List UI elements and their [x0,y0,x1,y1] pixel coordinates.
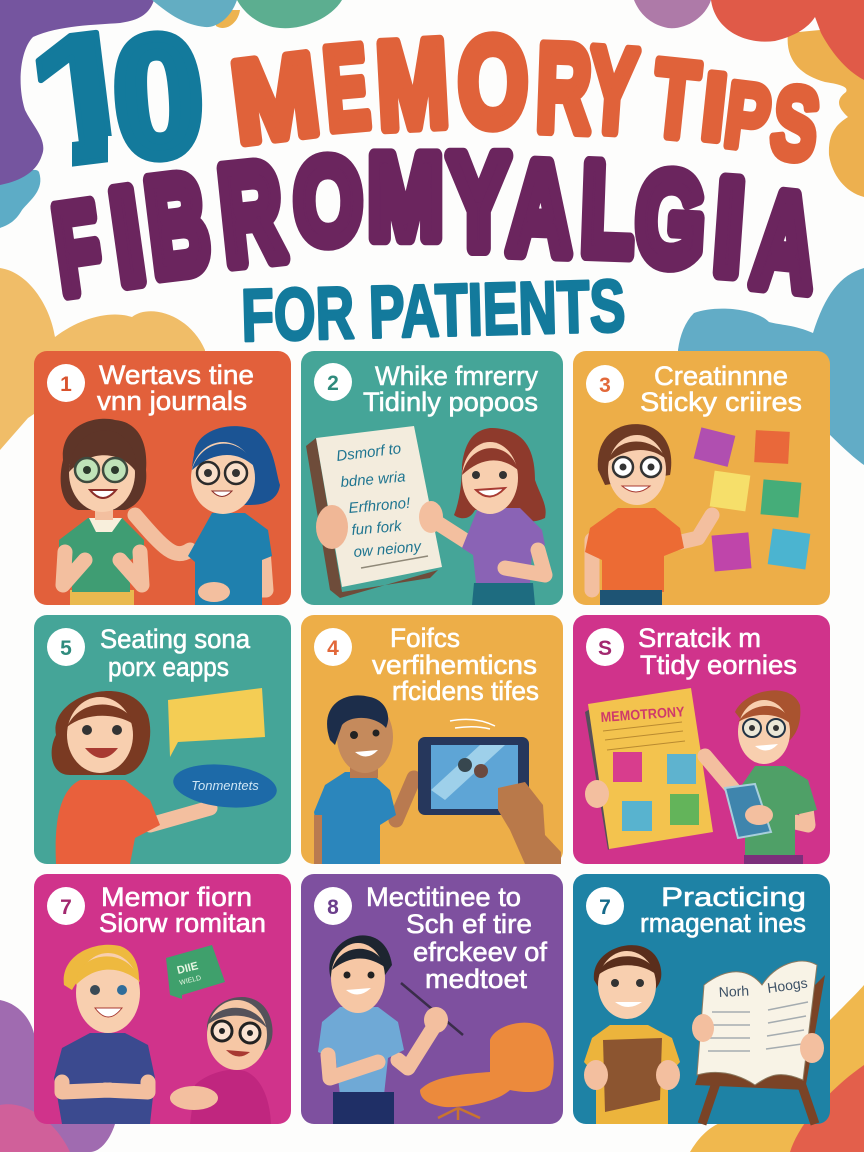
notebook with handwriting [306,426,443,598]
number badge [47,364,85,402]
title [18,0,826,357]
orange chair [420,1023,554,1120]
title line: fibromyalgia: A [506,135,575,282]
heading: Foifcs [390,623,460,653]
green sign: DIIE [176,960,199,977]
figure: blond boy [54,945,155,1124]
heading: Mectitinee to [366,882,521,912]
notebook with handwriting: bdne wria [340,468,406,491]
title line: memory tips: I [697,53,731,161]
number badge [586,887,624,925]
heading [366,882,548,994]
heading [372,623,539,706]
motion lines [450,719,495,729]
panel 4: speech bubble [34,615,291,864]
heading [363,361,538,417]
heading: Memor fiorn [101,882,252,912]
notebook with handwriting: Dsmorf to [335,440,402,465]
number badge [314,887,352,925]
title line: memory tips [225,12,826,183]
number badge: 3 [599,374,611,397]
number badge: 7 [599,896,611,919]
figure: boy in green with tablet [705,690,817,864]
heading: porx eapps [108,652,229,682]
panel 7: memory story [34,874,291,1124]
title line: memory tips: M [373,13,452,156]
title line: fibromyalgia: O [293,134,363,269]
title line: memory tips: Y [584,21,642,159]
title line: fibromyalgia: A [747,164,823,319]
heading: Whike fmrerry [375,361,538,391]
title line: fibromyalgia [46,128,823,321]
heading: Ttidy eornies [640,650,797,680]
heading: rfcidens tifes [392,676,539,706]
notebook with handwriting: ow neiony [353,538,423,561]
figure: man in blue shirt [314,695,414,864]
title line: memory tips: E [319,20,374,156]
sticky notes [694,427,810,572]
heading: Sticky criires [640,387,802,417]
title number 10: 0 [107,0,209,194]
heading: efrckeev of [413,937,548,967]
heading: Siorw romitan [99,908,266,938]
number badge [47,887,85,925]
yellow speech bubble [168,688,265,757]
panel 9: imagination book [573,874,830,1124]
title line: memory tips: R [534,18,594,158]
blue oval label: Tonmentets [191,778,259,793]
heading [640,361,802,417]
number badge: 5 [60,637,72,660]
number badge [586,365,624,403]
panel 2: tidy papers [301,351,563,605]
figure: boy with glasses in orange [585,424,712,605]
heading [100,624,251,682]
heading: Creatinnne [654,361,788,391]
title line: memory tips: M [225,29,325,168]
figure: smiling woman in orange [52,691,210,864]
title line: memory tips: P [720,63,776,170]
panel 5: tablet [301,615,563,864]
easel with open book [692,961,825,1124]
number badge: 4 [327,637,339,660]
title line: fibromyalgia: Y [448,128,509,277]
green sign [166,945,225,999]
title line: fibromyalgia: F [46,176,109,321]
heading: rmagenat ines [640,908,806,938]
figure: person with blue hair [135,426,280,605]
heading: verfihemticns [372,650,537,680]
title line: memory tips: T [648,38,704,162]
panel 1: journals [34,351,291,605]
easel with open book: Hoogs [766,974,808,996]
panel 3: sticky notes [573,351,830,605]
notebook with handwriting: fun fork [351,518,404,539]
number badge: 8 [327,896,339,919]
heading: Sch ef tire [406,909,532,939]
number badge [314,363,352,401]
number badge [314,628,352,666]
title line: fibromyalgia: M [368,131,443,264]
title line: memory tips: O [458,12,528,154]
number badge [47,628,85,666]
heading: Wertavs tine [99,360,254,390]
number badge: S [598,637,612,660]
title line: for patients: FOR PATIENTS [240,264,626,357]
heading [97,360,254,416]
heading [640,882,806,938]
figure: woman with auburn hair [433,428,546,605]
panel 6: notebook with sticky notes [573,615,830,864]
blue oval label [171,760,279,812]
title line: fibromyalgia: R [213,134,290,294]
heading: Tidinly popoos [363,387,538,417]
title number 10 [36,30,202,167]
heading [638,623,797,680]
heading: Practicing [661,882,806,912]
heading: vnn journals [97,386,247,416]
number badge [586,628,624,666]
yellow memo board [585,688,713,850]
number badge: 2 [327,372,339,395]
notebook with handwriting: Erfhrono! [348,495,412,517]
title line: fibromyalgia: L [579,137,636,283]
figure: woman with green glasses [59,419,146,605]
heading [99,882,266,938]
title line: fibromyalgia: I [710,152,748,303]
figure: man in light blue [318,935,463,1124]
number badge: 7 [60,896,72,919]
panel 8: meditation chair [301,874,563,1124]
easel with open book: Norh [718,982,749,1000]
yellow memo board: MEMOTRONY [600,703,686,725]
figure: older person with glasses [170,997,273,1124]
hand holding tablet [498,782,561,864]
title line: memory tips: S [765,65,826,183]
heading: Seating sona [100,624,251,654]
heading: medtoet [425,964,528,994]
heading: Srratcik m [638,623,761,653]
number badge: 1 [60,373,72,396]
title line: fibromyalgia: I [103,161,152,313]
title line: fibromyalgia: B [139,146,216,306]
green sign: WIELD [179,975,202,987]
title line: fibromyalgia: G [633,145,708,294]
tablet [418,737,529,815]
figure: boy in yellow [584,945,680,1124]
